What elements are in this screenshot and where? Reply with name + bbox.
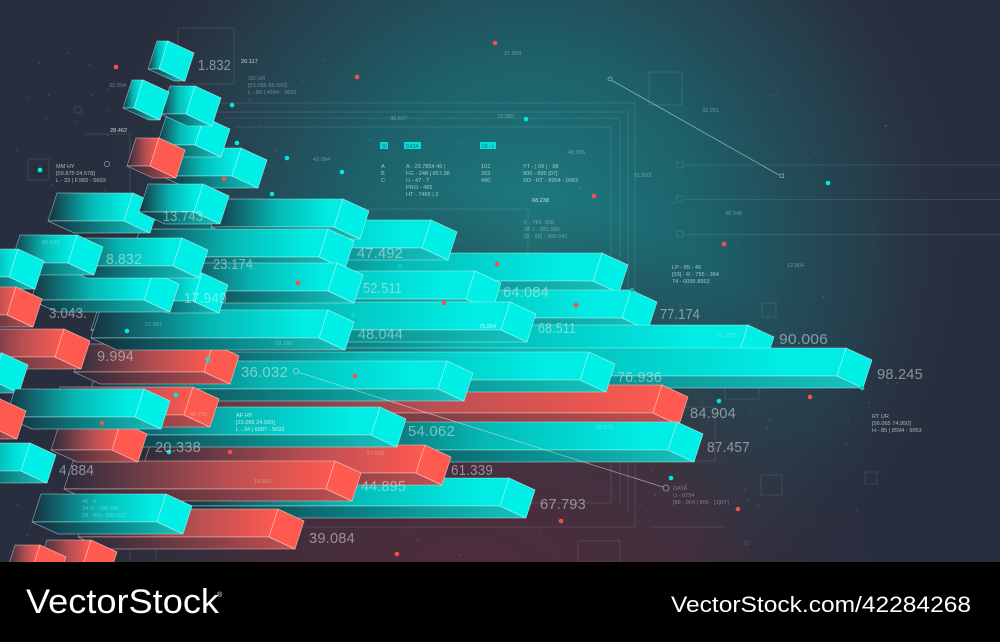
large value labels: 17.949 [184,290,227,307]
large value labels: 8.832 [106,251,142,268]
bar: bottom red one [38,540,117,580]
text block: MM HY: L - 33 | F.965 - 5693 [56,178,106,184]
text block: MM HY: [59.875 04.578] [56,171,95,177]
bar: 52.511 [121,271,501,311]
small scattered labels: 12.804 [787,263,804,269]
bar: cyan mid left [6,389,170,429]
small scattered labels: 32.094 [109,83,126,89]
text block: SD UR: SD UR [248,76,265,82]
particles [15,53,897,555]
data table: A - 23.7854 45 | [406,164,445,170]
small scattered labels: 42.094 [313,157,330,163]
bar: 57.997 long [91,310,354,350]
large value labels: 76.936 [617,369,662,386]
large value labels: 90.006 [779,331,828,348]
bar: upper long [211,199,369,239]
large value labels: 67.793 [540,496,586,513]
small scattered labels: 67.005 [367,451,384,457]
text block: LP: [03] - R - 756 - 384 [672,272,719,278]
large value labels: 61.339 [451,462,493,479]
data table: YT - | 09 | - 98 [523,164,558,170]
small scattered labels: 57.997 [145,322,162,328]
bar: 17.949 [141,273,228,313]
text block: MM HY: MM HY [56,164,75,170]
data table: 906 - 895 [07] [523,171,558,177]
small scattered labels: 36.837 [390,116,407,122]
cube: stack lower [157,117,230,157]
small scattered labels: 32.261 [702,108,719,114]
bar: 64.084 [191,253,628,293]
3D bar chart [0,41,872,585]
small scattered labels: 21.899 [504,51,521,57]
data table: A [381,164,385,170]
large value labels: 3.043. [49,305,87,322]
large value labels: 84.904 [690,405,736,422]
leader line: top right [608,77,784,178]
text block: 46-K: 34 H - 785.906 [82,506,119,512]
large value labels: 36.032 [241,364,288,381]
watermark banner: ® [217,591,223,599]
watermark banner: VectorStock [26,583,220,621]
data table [380,142,578,198]
bar: red lower left [51,422,147,462]
node ring [104,161,110,167]
small scattered labels: 46.948 [725,211,742,217]
large value labels: 20.338 [155,439,201,456]
data table: 203 [481,171,490,177]
bar: left edge red [0,287,42,327]
bar: 54.062 [91,407,406,447]
bar: 61.339 red [141,445,451,485]
small scattered labels: 48.005 [568,150,585,156]
large value labels: 47.492 [357,245,403,262]
data table: B [381,171,385,177]
small scattered labels: 68.238 [532,198,549,204]
bar: 23.174 lower [171,263,363,303]
bar: 84.904 red [91,385,688,425]
bar: behind red cube [161,148,267,188]
cube: stack upper [161,86,221,126]
data table: U - 47 - T [406,178,430,184]
data dots [38,41,864,556]
bar: left edge cyan [0,249,44,289]
large value labels: 44.895 [361,478,406,495]
bar: red mid left [51,387,219,427]
text block: DATA: U - 8754 [673,493,694,499]
data table: HT - 7465 | 2 [406,192,438,198]
small scattered labels: 51.782 [718,333,735,339]
bar: 39.084 red [78,509,304,549]
bar: 13.743 [139,184,229,224]
text block: 46-K: 46 - K [82,499,97,505]
text block: F-784: F - 784 .958 [524,220,554,226]
small scattered labels: 23.168 [275,341,292,347]
data table: PRO - 485 [406,185,432,191]
bar: left red long [0,329,90,369]
large value labels: 87.457 [707,439,750,456]
bar: 90.006 [191,325,774,365]
bar: 76.936 [141,352,615,392]
watermark banner: VectorStock.com/42284268 [671,592,971,617]
data table: 490 [481,178,490,184]
cube: second [123,80,169,120]
text block: F-784: 28 J - 381.906 [524,227,560,233]
data table: 101 [481,164,490,170]
large value labels: 64.084 [503,284,549,301]
text block: RT UR: H - 85 | 8594 - 9053 [872,428,922,434]
bar: 98.245 [191,348,872,388]
text block: SD UR: L - 85 | 4594 - 9893 [248,90,297,96]
text block: 46-K: [M - 85] - 896.532 [82,513,126,519]
text block: SD UR: [53.085 86.550] [248,83,287,89]
bar: left edge cyan three [0,443,56,483]
text block: DATA: DATA [673,486,687,492]
bar: 9.994 red [74,344,239,384]
large value labels: 1.832 [198,57,231,74]
text block: LP: LP - 85 - 46 [672,265,701,271]
data table: SI [382,144,387,150]
bar: 67.793 [181,478,535,518]
bar: 77.174 [241,290,657,330]
large value labels: 68.511 [538,320,576,337]
small scattered labels [42,51,804,485]
data table: 03 - I [482,144,493,150]
large value labels: 39.084 [309,530,355,547]
large value labels: 77.174 [660,306,700,323]
text block: F-784: [D - 85] - 300.542 [524,234,568,240]
large value labels: 4.884 [59,462,94,479]
bar: left edge red two [0,399,26,439]
bar: 44.895 red [64,461,361,501]
data table: DATA [406,144,419,150]
small scattered labels: 81.643 [42,240,59,246]
text block: AF HY: L - 34 | 6087 - 5693 [236,427,285,433]
text block: RT UR: RT UR [872,414,889,420]
text block: RT UR: [56.065 74.950] [872,421,911,427]
data table: C [381,178,385,184]
small scattered labels: 20.117 [241,59,258,65]
bar: left edge cyan two [0,353,28,393]
small scattered labels: 75.904 [479,324,496,330]
text block: AF HY: [15.065 24.560] [236,420,275,426]
data table: FG - 248 | 857.38 [406,171,450,177]
large value labels: 13.743 [163,208,203,225]
bar: 81.643 [11,235,103,275]
bar: 3.043 [31,272,179,312]
small scattered labels: 46.775 [190,412,207,418]
text block: LP: 74 - 0095.8953 [672,279,710,285]
cube: red [127,138,185,178]
small scattered labels: 63.972 [596,425,613,431]
bar: 23.174 upper [131,229,354,269]
bar: bottom red two [6,545,66,585]
data table: SO - RT - 8954 - 0063 [523,178,578,184]
large value labels: 9.994 [97,348,134,365]
leader line: 36.032 to DATA [293,368,669,491]
large value labels: 54.062 [408,423,455,440]
large value labels: 98.245 [877,366,923,383]
bar: 87.457 [291,422,703,462]
small scattered labels: 28.462 [110,128,127,134]
bar: 47.492 [141,220,457,260]
bar: 46-K [32,494,192,534]
text block: AF HY: AF HY [236,413,253,419]
bar: 36.032 [91,361,473,401]
bar: 48.044 [91,302,536,342]
small scattered labels: 61.893 [634,173,651,179]
large value labels: 23.174 [213,256,253,273]
small scattered labels: 76.065 [497,114,514,120]
bar: 8.832 [61,238,208,278]
large value labels: 48.044 [358,326,403,343]
text block: DATA: [89 - 904 | 895 - [J]RT] [673,500,729,506]
large value labels: 52.511 [363,280,402,297]
cube: top [148,41,194,81]
large value labels [49,57,923,547]
small scattered labels: 19.583 [254,479,271,485]
bar: upper left [48,193,159,233]
watermark banner [0,562,1000,642]
